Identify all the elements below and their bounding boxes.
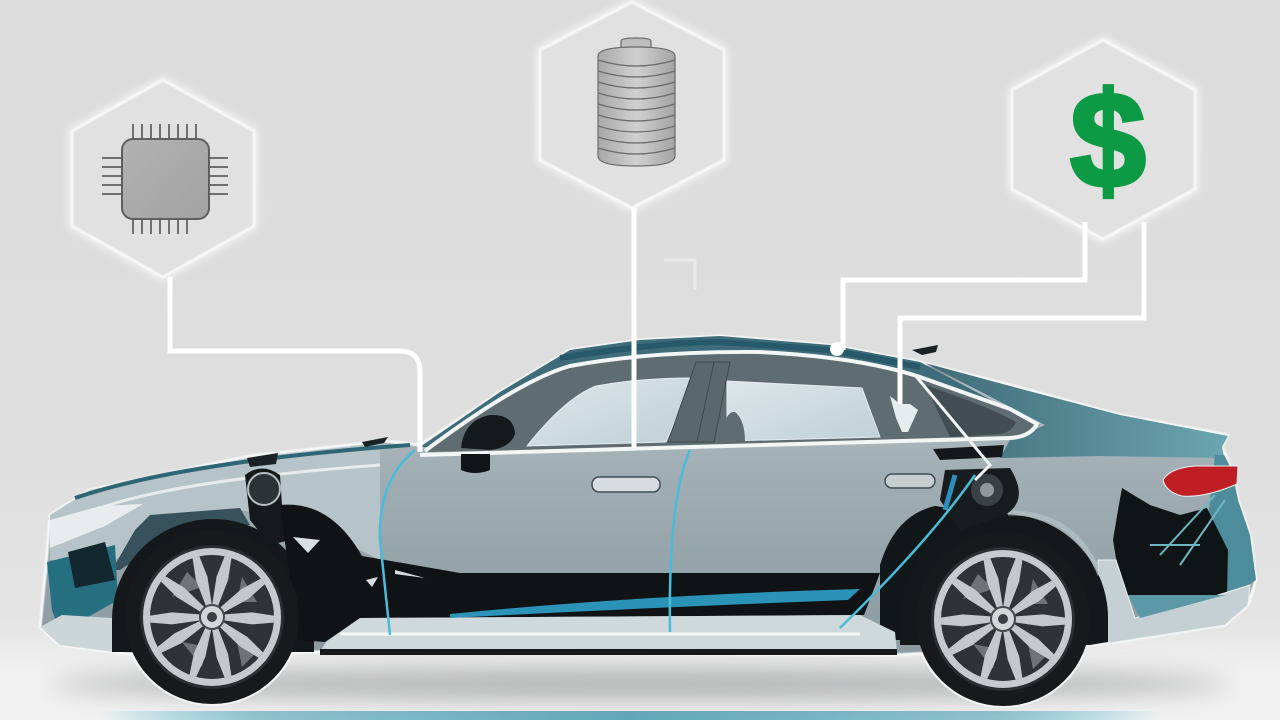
side mirror (461, 415, 515, 473)
window surround (425, 353, 1036, 452)
rear bumper teal inset (1128, 595, 1225, 618)
roof node (830, 342, 844, 356)
rear inner arch (880, 506, 1000, 640)
rear strut (940, 468, 1019, 530)
window: quarter (925, 385, 1016, 437)
roof teal strip (560, 342, 920, 367)
icon: dollar sign: $ (1070, 64, 1146, 216)
rear headrest (720, 412, 745, 442)
front bumper lip (40, 615, 114, 652)
b-pillar (668, 362, 730, 442)
floor glow strip (100, 711, 1160, 720)
rear tail teal edge (1200, 455, 1256, 600)
front wheel (125, 530, 299, 704)
hood teal crease (75, 445, 410, 498)
rear arch lip (1008, 513, 1100, 575)
taillight (1163, 466, 1238, 496)
floor reflection (0, 630, 1280, 720)
door blue lines (380, 450, 975, 635)
car body (40, 336, 1256, 655)
rear blue detail (945, 475, 955, 510)
connector: dollar to rear window (900, 222, 1144, 410)
door handles (592, 477, 660, 492)
front strut tower (245, 468, 290, 545)
arrowhead (890, 396, 918, 432)
hood pale crease (100, 465, 380, 508)
window: rear (727, 381, 880, 441)
icon: microchip (102, 124, 228, 234)
icon: battery cell stack (598, 38, 675, 166)
faint connector ghost (664, 260, 695, 290)
rear quarter teal deck (925, 363, 1228, 458)
strut cap (248, 473, 280, 505)
mechanical highlights (293, 537, 425, 587)
rear mechanics teal detail (1150, 495, 1225, 565)
hexagon: battery (540, 2, 724, 208)
hood and front fender light panel (50, 443, 380, 560)
rear wheel arch (900, 514, 1108, 645)
hexagon: dollar (1012, 40, 1195, 239)
chrome window trim (420, 352, 1037, 455)
upper cabin band (420, 336, 1040, 447)
front fascia teal block (47, 545, 118, 633)
car (40, 336, 1256, 706)
rear bumper (1098, 560, 1250, 643)
diagonal white trim line (915, 375, 990, 480)
wiper (362, 437, 388, 447)
teal panel behind front wheel (296, 590, 332, 640)
antenna (912, 345, 938, 355)
inner front arch (280, 505, 880, 642)
dark handle bar (933, 445, 1004, 460)
front grille mechanics (68, 542, 115, 588)
side skirt (320, 615, 897, 652)
hood hinge (247, 453, 278, 467)
window: front (527, 378, 693, 446)
connector: dollar to roof (843, 222, 1085, 350)
rear wheel (916, 532, 1090, 706)
rear strut disc (969, 472, 1005, 508)
car ground shadow (50, 668, 1230, 700)
headlight (50, 504, 143, 548)
connector: chip to car (170, 277, 420, 452)
fender dark panel (112, 508, 250, 570)
front wheel arch (112, 519, 314, 652)
connector: battery to car (632, 208, 636, 448)
hexagon: chip (72, 80, 254, 277)
rear mechanics (1113, 488, 1228, 595)
blue energy stripe (450, 589, 860, 618)
